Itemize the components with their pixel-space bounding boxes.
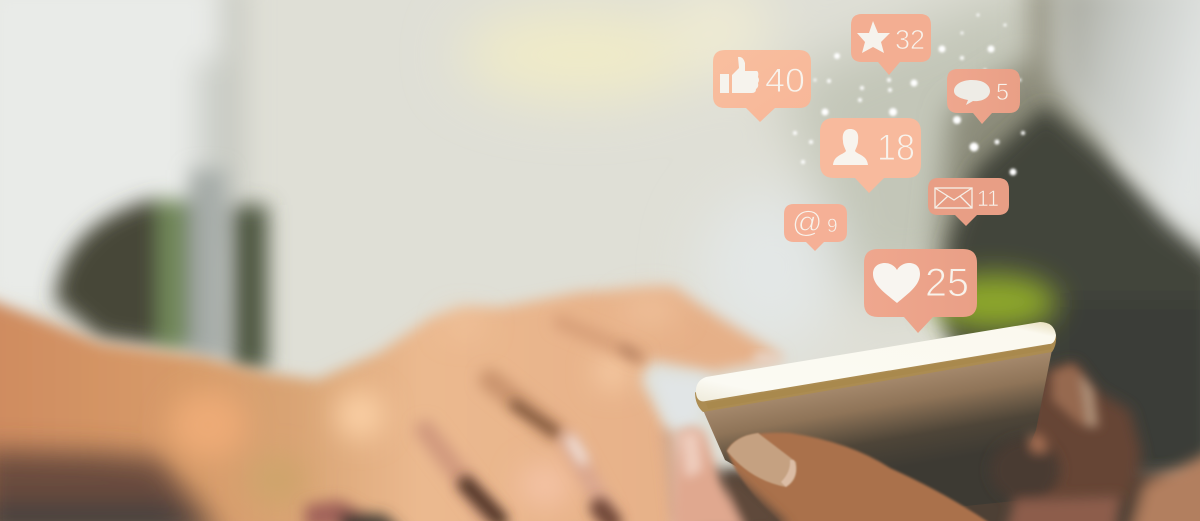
right hand behind the phone [700,362,1200,521]
lower fingers [1005,496,1120,521]
gold band [695,335,1056,412]
broad shading along finger creases [560,322,640,356]
shadow blending phone into fingers [990,438,1060,502]
icon: speech bubble [954,80,990,105]
notification: hearts 25 [864,249,977,333]
notification: mentions 9: 9 [827,216,838,237]
icon: star [857,21,890,53]
gap between middle and ring finger [514,404,555,432]
wrist shadow at bottom [305,500,385,521]
left hand and forearm, typing [0,287,785,521]
notification: favourites 32 [851,14,931,75]
gap between ring and little finger [466,484,500,520]
left thumb [672,427,745,521]
crease under index finger [622,348,638,358]
notification: followers 18 [820,118,921,193]
icon: thumbs up [720,57,759,93]
notification: likes 40 [713,50,811,122]
thumbnail [727,433,797,487]
white edge [696,322,1056,401]
dark under thumb [730,470,790,521]
phone back [703,350,1052,520]
notification: followers 18: 18 [877,127,915,168]
index fingernail [752,352,785,365]
sliver between fingers [600,508,612,521]
notification: mail 11 [928,178,1009,226]
smartphone [695,322,1056,520]
notification: hearts 25: 25 [925,261,969,305]
icon: heart [873,263,920,303]
notification: mail 11: 11 [977,186,999,211]
right thumb and finger in front of phone [672,427,1120,521]
notification: mentions 9 [784,204,847,251]
icon: at sign: @ [792,206,822,239]
notification: comments 5: 5 [996,79,1009,106]
notification: likes 40: 40 [765,62,805,100]
icon: envelope [935,188,972,208]
notification: comments 5 [947,69,1020,124]
sparkles [793,14,1025,176]
icon: person [833,129,868,165]
light shirt under index finger [650,372,708,428]
notification: favourites 32: 32 [895,24,925,55]
